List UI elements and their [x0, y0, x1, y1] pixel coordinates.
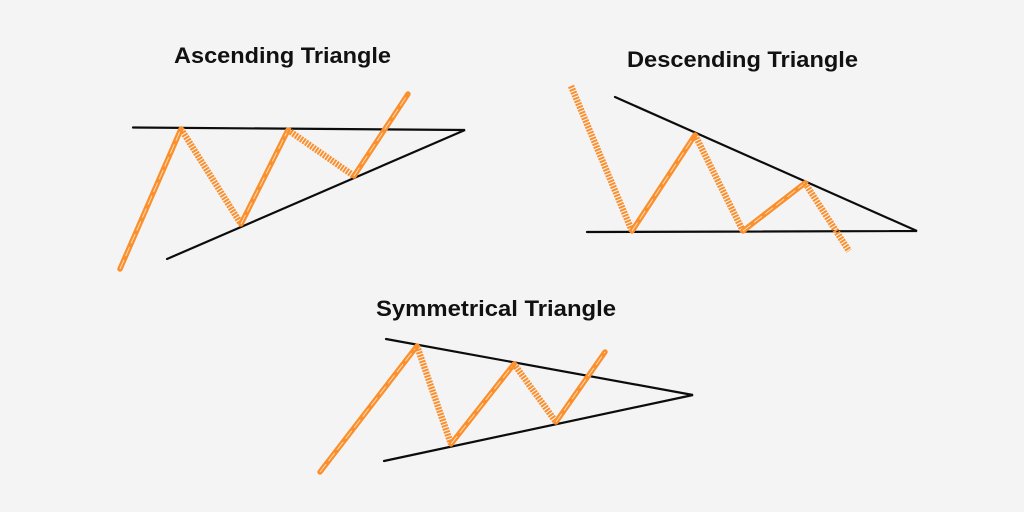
chart: ascending triangle trend lines: [133, 128, 465, 259]
panel: descending triangle: [571, 47, 917, 251]
heading: descending triangle: Descending Triangle: [627, 47, 858, 72]
heading: symmetrical triangle: Symmetrical Triangle: [376, 296, 616, 321]
chart: ascending triangle price path: [120, 94, 408, 269]
heading: ascending triangle: Ascending Triangle: [174, 43, 391, 68]
panel: ascending triangle: [120, 43, 465, 269]
chart: symmetrical triangle price path: [320, 346, 605, 472]
chart: descending triangle price path: [571, 86, 849, 251]
panel: symmetrical triangle: [320, 296, 693, 472]
chart: symmetrical triangle trend lines: [384, 339, 693, 461]
chart: descending triangle trend lines: [587, 97, 917, 232]
